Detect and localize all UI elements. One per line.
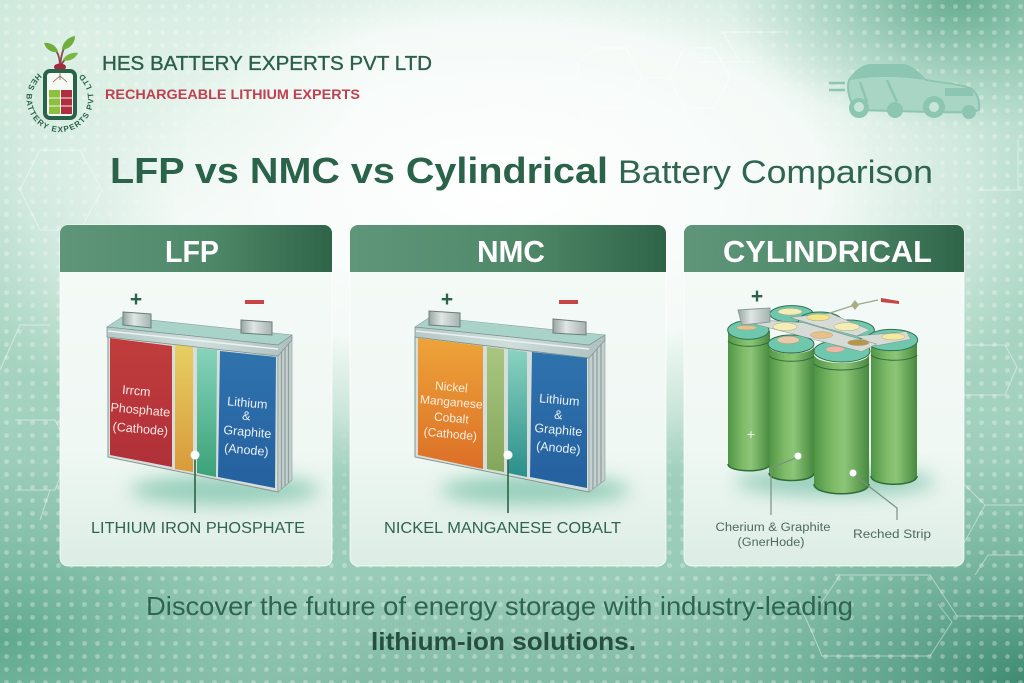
cathode label: Cobalt (433, 410, 470, 427)
cathode label: Manganese (419, 392, 484, 412)
anode label: Lithium (227, 394, 268, 412)
cathode label (419, 379, 484, 443)
minus sign (559, 300, 578, 304)
cathode label: (Cathode) (423, 425, 478, 443)
cylinder 3 (814, 340, 870, 494)
icon: car (829, 65, 979, 119)
minus sign (881, 298, 899, 304)
closing statement: lithium-ion solutions. (371, 628, 636, 656)
cylinder 1: + (747, 426, 755, 442)
cylinder label left: (GnerHode) (738, 537, 805, 549)
anode label: Graphite (534, 421, 583, 439)
anode label: Graphite (223, 423, 272, 441)
plus sign: + (130, 288, 142, 311)
plus sign: + (751, 285, 763, 308)
pointer (504, 450, 512, 513)
LFP header: LFP (165, 234, 219, 269)
LFP caption: LITHIUM IRON PHOSPHATE (91, 520, 305, 537)
anode label: (Anode) (224, 441, 269, 459)
panel: LFP (60, 225, 332, 566)
anode label: (Anode) (536, 439, 581, 457)
positive terminal (738, 308, 770, 325)
cathode label: (Cathode) (112, 420, 169, 438)
logo plant (44, 36, 78, 70)
closing statement: Discover the future of energy storage with industry-leading (146, 591, 853, 621)
cathode label: Irrcm (122, 383, 151, 399)
logo (26, 36, 94, 132)
logo ring text: HES BATTERY EXPERTS PVT LTD (26, 73, 94, 132)
title (110, 150, 933, 191)
LFP battery diagram (107, 288, 320, 513)
company name: HES BATTERY EXPERTS PVT LTD (102, 53, 432, 75)
NMC battery diagram (415, 288, 630, 513)
cell pack (728, 285, 935, 520)
minus sign (245, 300, 264, 304)
panel: Cylindrical (684, 225, 964, 566)
panel: NMC (350, 225, 666, 566)
cylinder label right: Reched Strip (853, 529, 931, 541)
pointer (190, 450, 200, 513)
cylinder 4 (871, 343, 917, 484)
cylinder 1 (728, 331, 770, 471)
NMC header (350, 225, 666, 272)
Cylindrical header (684, 225, 964, 272)
company tagline: RECHARGEABLE LITHIUM EXPERTS (105, 87, 360, 102)
Cylindrical header: CYLINDRICAL (723, 234, 932, 269)
logo battery (45, 71, 75, 118)
cylinder label left (716, 522, 830, 549)
closing statement (146, 591, 853, 656)
cylinder 2 (768, 335, 814, 480)
title: LFP vs NMC vs Cylindrical (110, 150, 608, 191)
anode label: & (242, 409, 252, 423)
anode label: Lithium (539, 391, 580, 409)
cell tops and straps (728, 306, 918, 351)
cathode label (110, 383, 171, 438)
anode label: & (554, 408, 564, 422)
nickel strips (752, 313, 911, 352)
cathode label: Phosphate (110, 400, 171, 420)
cylinder label left: Cherium & Graphite (716, 522, 830, 534)
LFP header (60, 225, 332, 272)
anode label (223, 394, 272, 459)
pointers (771, 452, 897, 520)
title: Battery Comparison (618, 154, 933, 190)
anode label (534, 391, 583, 457)
cell caps (737, 308, 905, 352)
plus sign: + (441, 288, 453, 311)
cathode label: Nickel (434, 379, 468, 395)
NMC caption: NICKEL MANGANESE COBALT (384, 520, 621, 537)
negative wire (830, 300, 878, 313)
back cell rims (728, 306, 918, 351)
NMC header: NMC (477, 234, 545, 269)
